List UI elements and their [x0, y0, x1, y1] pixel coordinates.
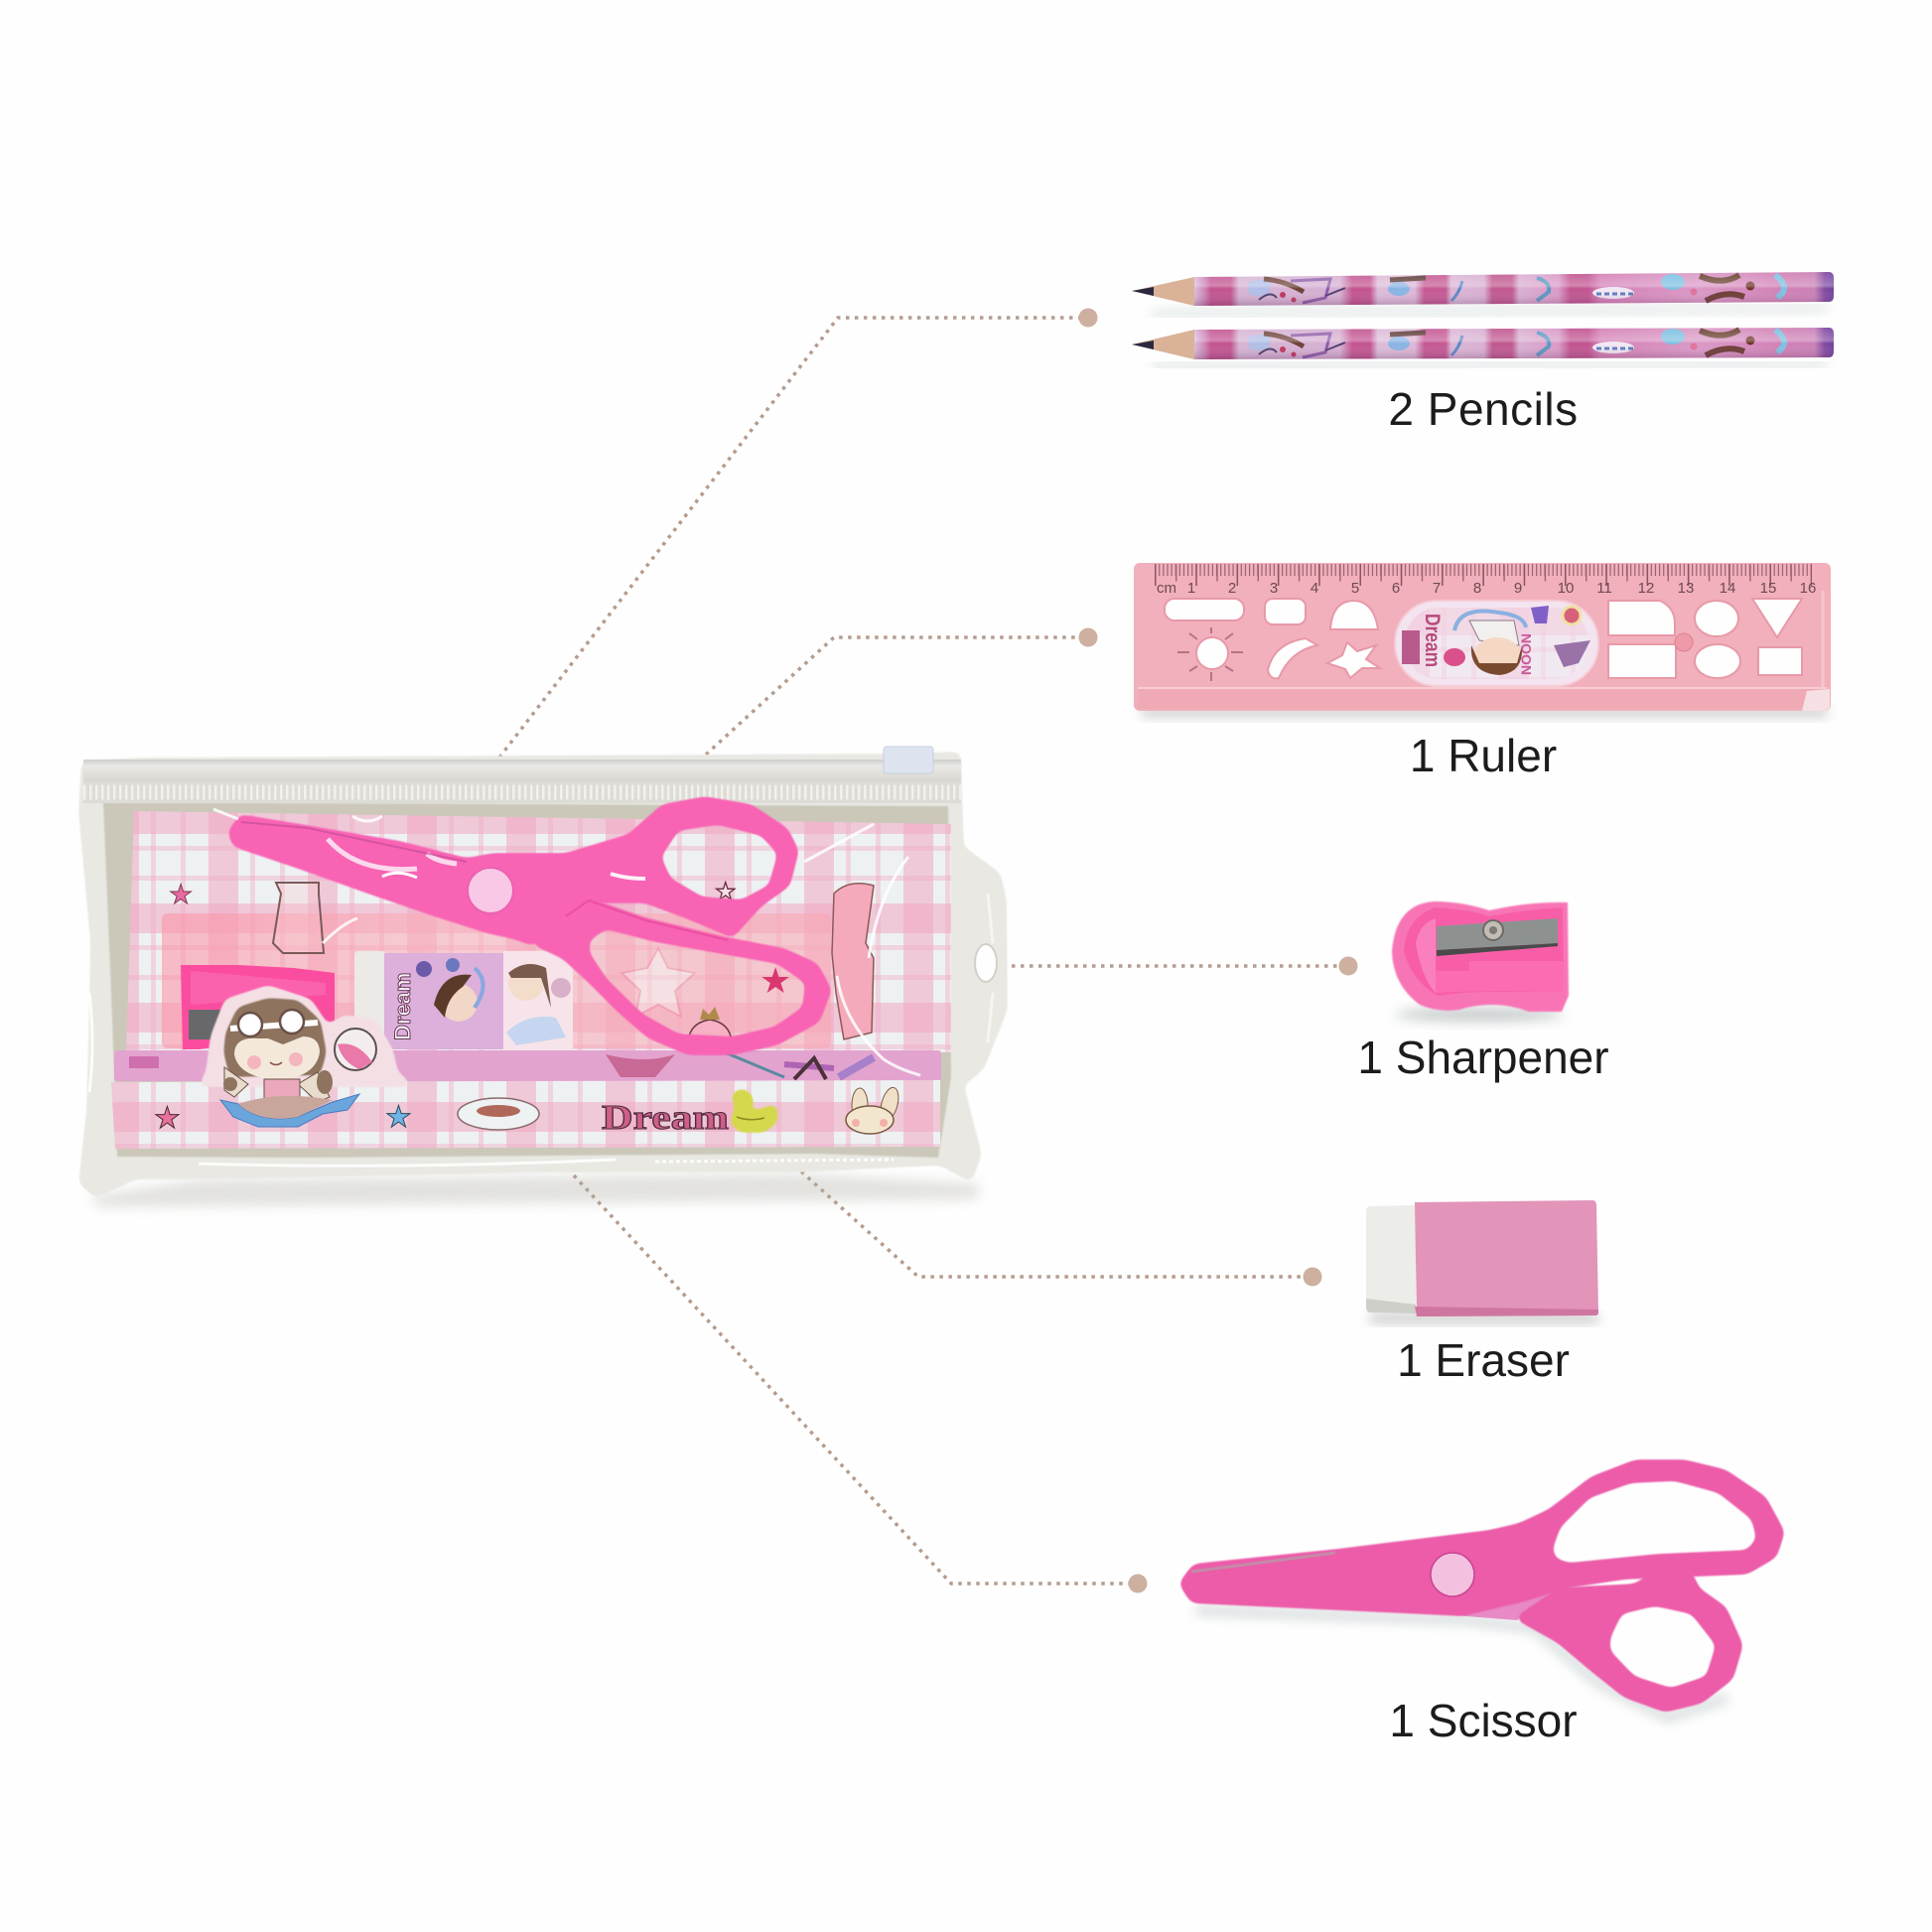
beach ball [335, 1029, 376, 1070]
connector: eraser [801, 1172, 1322, 1287]
ruler numbers: 7 [1433, 580, 1441, 597]
pivot rivet [1431, 1553, 1474, 1596]
ruler numbers: 15 [1760, 580, 1776, 597]
ruler numbers: cm [1157, 580, 1176, 597]
badge cat [1531, 606, 1549, 623]
printed front sleeve [111, 1080, 940, 1149]
sharpener inner shading [1416, 918, 1436, 993]
bowl sticker [458, 1098, 539, 1130]
badge wave [1454, 611, 1526, 630]
badge donut [1563, 607, 1581, 624]
badge heart [1444, 648, 1465, 666]
girl body [223, 1067, 333, 1102]
blade edge highlight [1191, 1553, 1335, 1572]
item: pencils [1132, 272, 1834, 366]
blush and smile [247, 1052, 303, 1069]
ruler numbers [1157, 580, 1816, 597]
star sticker pink: ★ [154, 1102, 181, 1135]
badge dream text: Dream [1421, 614, 1444, 667]
ruler rivet [1675, 633, 1693, 651]
ruler numbers: 2 [1228, 580, 1236, 597]
connector: pencils [499, 308, 1098, 758]
star stickers on card: ★ [759, 960, 791, 1001]
ruler sun rays [1177, 627, 1243, 681]
connector: sharpener [1003, 957, 1358, 975]
clear jar sticker [273, 883, 324, 953]
plastic reflections [89, 809, 993, 1166]
dream logo: Dream [602, 1098, 729, 1137]
crown sticker [688, 1007, 732, 1041]
item: scissor [1179, 1460, 1784, 1718]
pivot rivet [468, 868, 513, 913]
lower blade tail [1454, 1588, 1559, 1620]
hang hole [975, 944, 997, 982]
item: eraser [1366, 1200, 1598, 1322]
zip closure [83, 747, 961, 803]
item: sharpener [1392, 901, 1569, 1022]
blade reflection [241, 822, 645, 879]
ruler numbers: 5 [1351, 580, 1359, 597]
packaged stationery set in clear pouch [79, 747, 1007, 1207]
ruler numbers: 14 [1720, 580, 1735, 597]
ruler numbers: 1 [1187, 580, 1195, 597]
ruler numbers: 12 [1638, 580, 1654, 597]
swimmer sticker on eraser [503, 951, 573, 1050]
label: 1 Eraser: 1 Eraser [1397, 1334, 1570, 1386]
handle edge shading [566, 900, 728, 940]
ruler lower strip [1138, 591, 1830, 711]
pencil strip in pouch [114, 1050, 941, 1081]
item: ruler [1134, 563, 1831, 717]
girl hair [224, 999, 326, 1076]
star stickers on card [169, 879, 791, 1001]
ruler millimetre ticks [1155, 564, 1812, 576]
ruler badge [1395, 601, 1598, 686]
pouch inner tint [103, 802, 951, 1158]
pencil one [1132, 272, 1834, 306]
pencil strip doodles [129, 1052, 874, 1079]
girl face [234, 1036, 320, 1080]
connector: ruler [706, 627, 1098, 755]
ruler numbers: 6 [1392, 580, 1400, 597]
badge label: NOON [1518, 633, 1534, 675]
lower handle [1515, 1573, 1742, 1712]
ruler numbers: 16 [1800, 580, 1816, 597]
ruler numbers: 10 [1558, 580, 1574, 597]
badge plaid [1405, 608, 1588, 679]
ruler numbers: 3 [1270, 580, 1278, 597]
sharpener floor [1436, 961, 1564, 993]
ruler numbers: 13 [1678, 580, 1694, 597]
pink ruler inside pouch [162, 913, 831, 1048]
printed backing card [126, 811, 951, 1052]
label: 1 Scissor: 1 Scissor [1389, 1695, 1578, 1746]
sharpener cavity [1404, 907, 1564, 996]
badge girl [1469, 621, 1522, 675]
goggles [230, 1010, 318, 1036]
water splash [220, 1094, 359, 1127]
ruler numbers: 8 [1473, 580, 1481, 597]
lower handle [531, 898, 831, 1054]
connector: scissor [574, 1175, 1148, 1592]
duck sticker [730, 1089, 777, 1132]
pencil two [1132, 328, 1834, 359]
badge basket [1554, 640, 1590, 667]
badge calendar [1402, 630, 1420, 664]
label: 2 Pencils: 2 Pencils [1388, 383, 1579, 435]
legs [238, 1096, 333, 1119]
ruler stencil cut-outs [1165, 599, 1802, 678]
sharpener inside pouch [181, 965, 335, 1049]
blade and upper handle [1179, 1460, 1784, 1615]
bunny sticker [846, 1086, 901, 1134]
ruler centimetre ticks [1155, 564, 1812, 586]
ruler numbers: 9 [1514, 580, 1522, 597]
vertical side sticker [832, 884, 874, 1039]
star stickers on card: ★ [715, 879, 737, 905]
eraser inside pouch [354, 951, 503, 1049]
ruler half-centimetre ticks [1175, 564, 1812, 582]
eraser pink sleeve [1415, 1200, 1598, 1316]
label: 1 Ruler: 1 Ruler [1410, 730, 1557, 781]
label: 1 Sharpener: 1 Sharpener [1357, 1032, 1609, 1083]
pouch body [79, 753, 1007, 1197]
eraser inside pouch: Dream [390, 973, 415, 1040]
star stickers on card: ★ [169, 880, 193, 909]
star sticker blue: ★ [385, 1101, 412, 1134]
sharpener blade [1437, 918, 1558, 956]
scissors inside pouch [228, 797, 831, 1054]
ruler numbers: 11 [1596, 580, 1612, 597]
ruler numbers: 4 [1311, 580, 1318, 597]
girl die-cut sticker [199, 986, 414, 1127]
eraser white end [1366, 1205, 1416, 1313]
upper blade and handle [228, 797, 798, 945]
